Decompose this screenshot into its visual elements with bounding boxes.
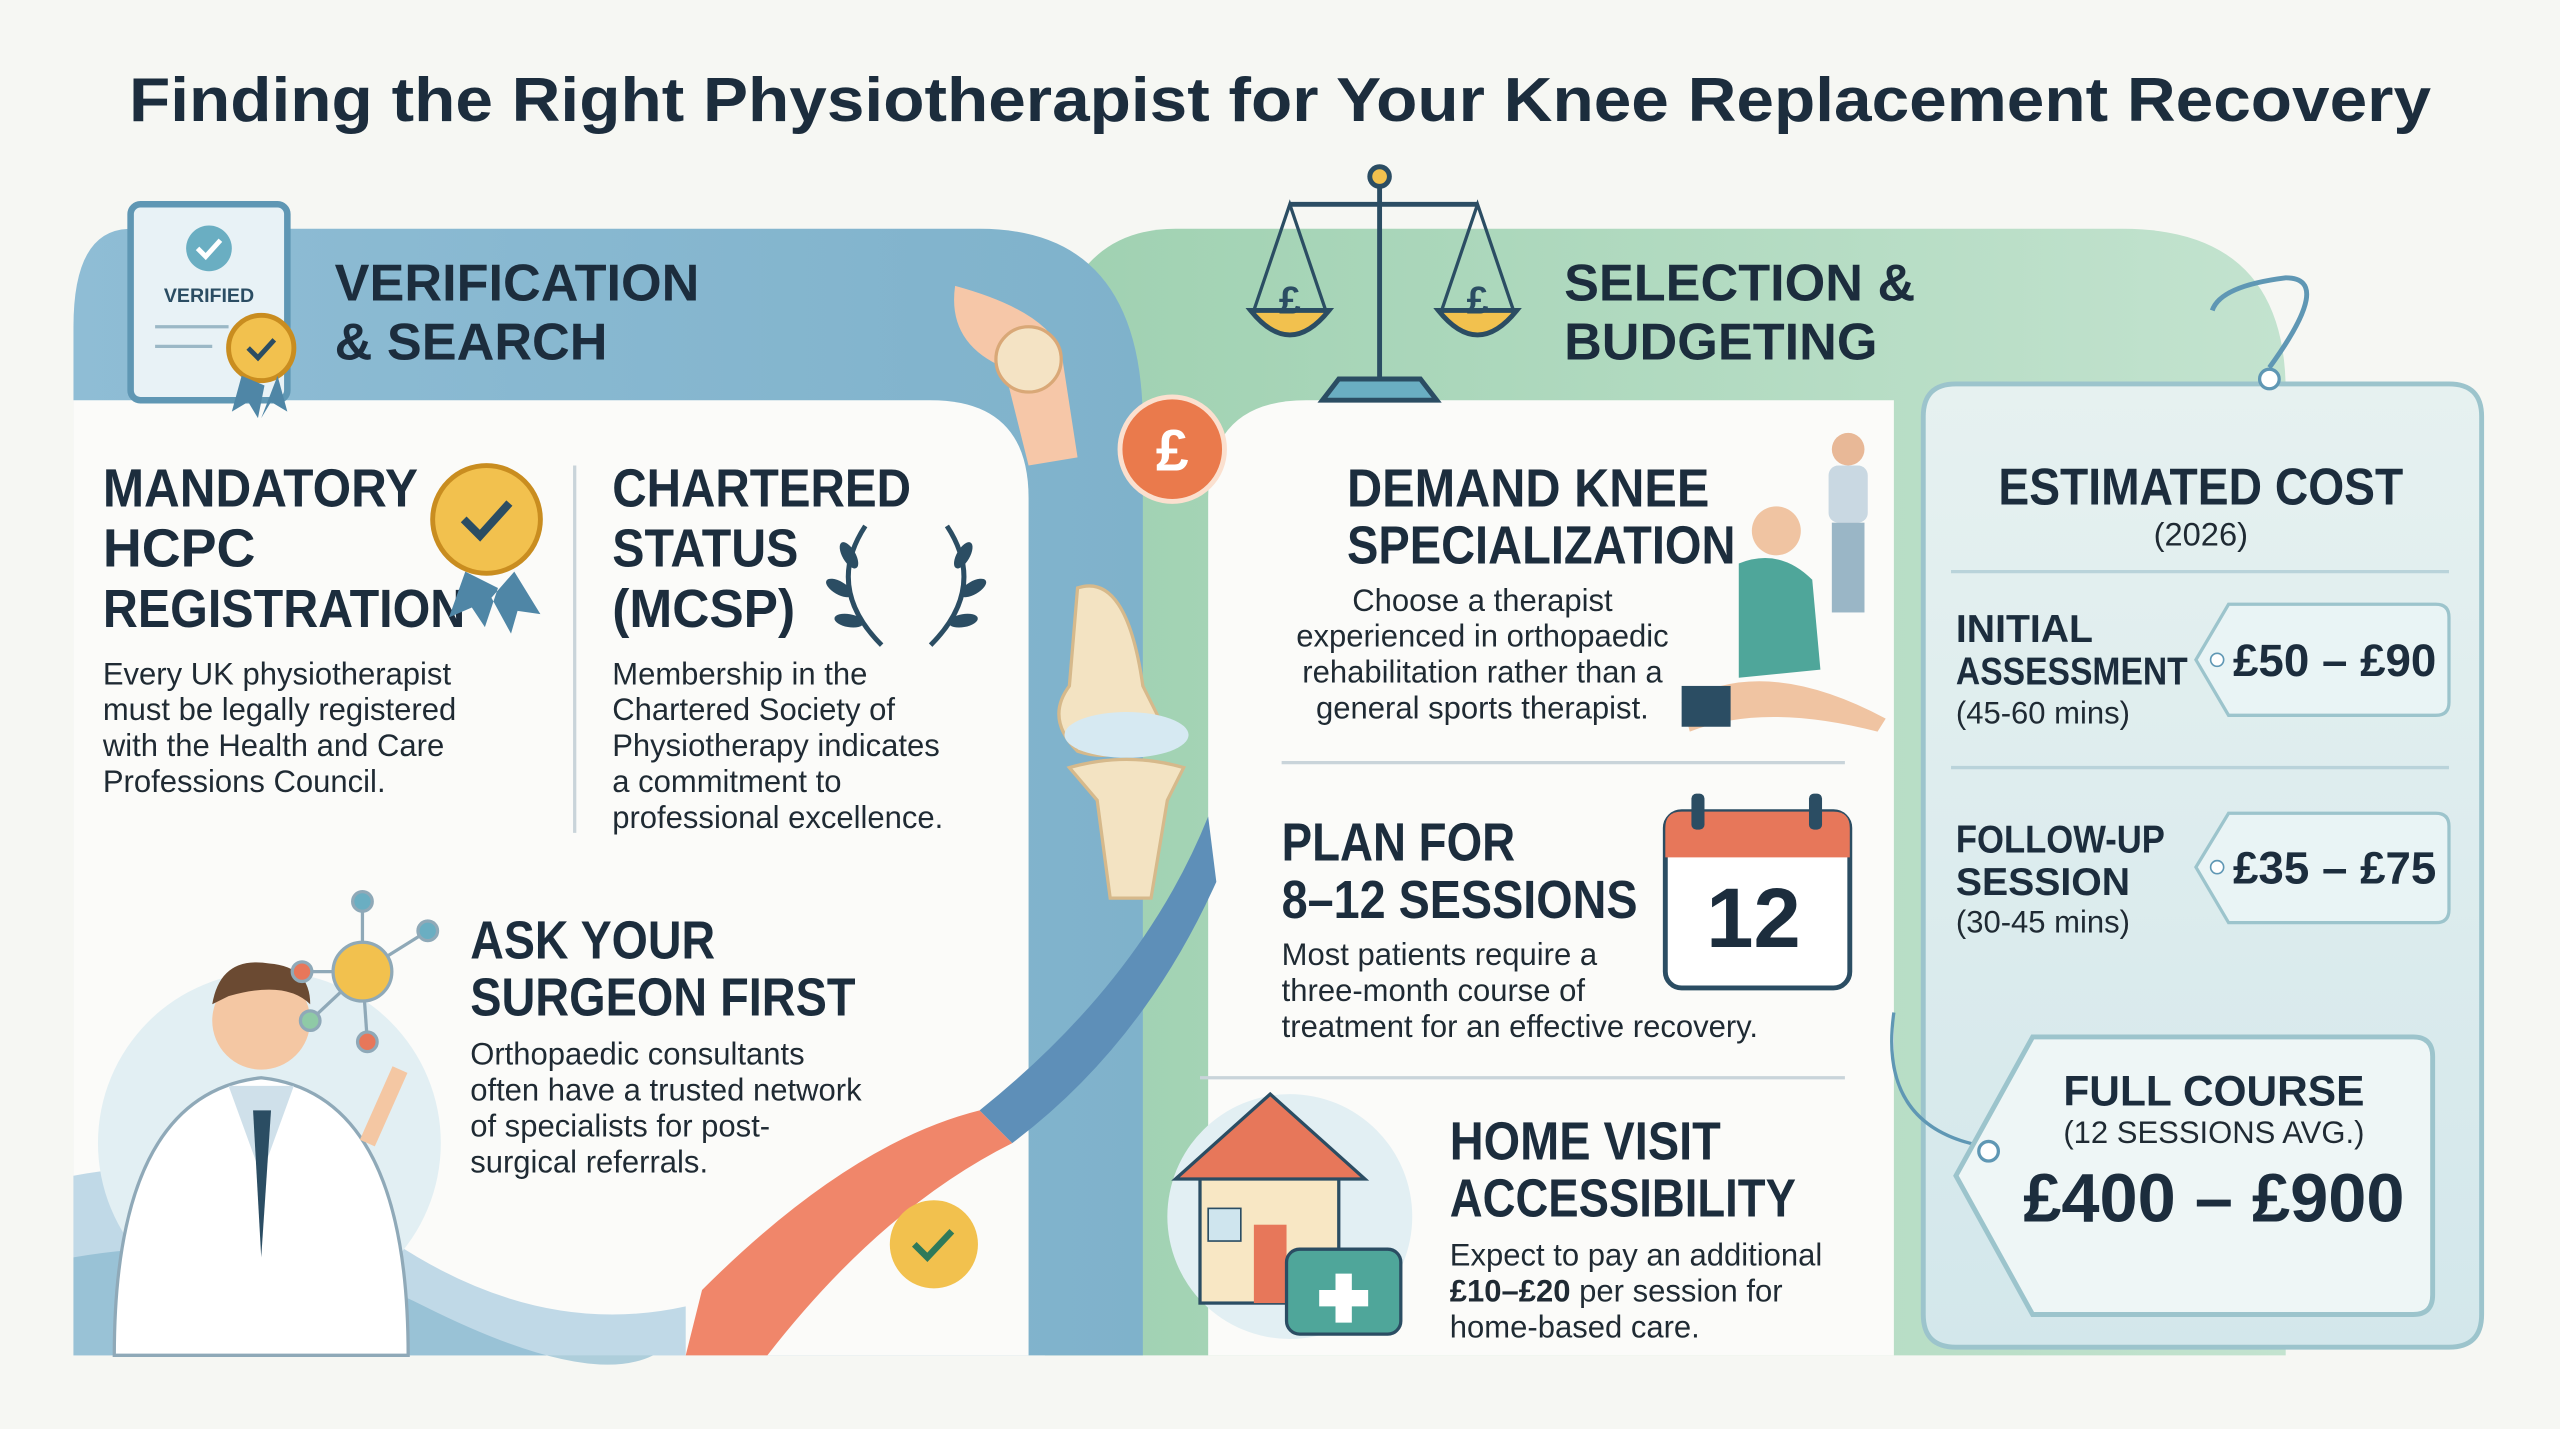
section: chartered: Chartered Society of <box>612 692 895 727</box>
section: home visit: £10–£20 per session for <box>1450 1273 1783 1308</box>
section: chartered <box>612 458 989 835</box>
price row: initial: £50 – £90 <box>2233 635 2436 686</box>
section: knee specialization: DEMAND KNEE <box>1347 458 1709 518</box>
title: Finding the Right Physiotherapist for Your Knee Replacement Recovery <box>129 66 2432 135</box>
icon: balance scale: £ <box>1467 280 1489 323</box>
section: sessions <box>1282 813 1758 1044</box>
icon: pound coin <box>1120 397 1224 501</box>
price tag: full course <box>1892 1012 2433 1314</box>
section: HCPC: MANDATORY <box>103 458 418 518</box>
heading: verification & search: VERIFICATION <box>335 255 699 313</box>
section: sessions: treatment for an effective recovery. <box>1282 1009 1758 1044</box>
price tag: full course: £400 – £900 <box>2023 1159 2405 1236</box>
heading: selection & budgeting: BUDGETING <box>1564 313 1878 371</box>
price row: follow-up: (30-45 mins) <box>1956 904 2130 939</box>
section: surgeon: of specialists for post- <box>470 1109 770 1144</box>
icon: verified certificate: VERIFIED <box>164 285 254 307</box>
section: HCPC: Every UK physiotherapist <box>103 656 451 691</box>
section: HCPC <box>102 458 540 799</box>
section: sessions: PLAN FOR <box>1282 813 1515 873</box>
heading: estimated cost: ESTIMATED COST <box>1998 459 2403 517</box>
section: HCPC: must be legally registered <box>103 692 456 727</box>
section: surgeon: Orthopaedic consultants <box>470 1037 805 1072</box>
section: sessions: Most patients require a <box>1282 937 1598 972</box>
icon: laurel <box>823 526 989 645</box>
panel: price tag <box>1892 278 2482 1347</box>
section: chartered: Membership in the <box>612 656 867 691</box>
heading: selection & budgeting <box>1564 255 1915 371</box>
icon: balance scale: £ <box>1279 280 1301 323</box>
panel: blue ribbon <box>73 229 1143 1355</box>
heading: verification & search: & SEARCH <box>335 313 608 371</box>
panel: green ribbon <box>1045 229 2286 1355</box>
section: chartered: CHARTERED <box>612 458 911 518</box>
price row: initial: INITIAL <box>1956 608 2093 651</box>
section: surgeon: SURGEON FIRST <box>470 968 856 1028</box>
section: knee specialization: Choose a therapist <box>1352 583 1613 618</box>
section: knee specialization <box>1296 458 1736 726</box>
price row: initial: ASSESSMENT <box>1956 650 2188 693</box>
price row: follow-up: SESSION <box>1956 861 2130 904</box>
section: surgeon <box>470 911 862 1179</box>
section: sessions: three-month course of <box>1282 973 1585 1008</box>
icon: network <box>292 892 438 1052</box>
section: HCPC: with the Health and Care <box>102 728 444 763</box>
section: home visit: Expect to pay an additional <box>1450 1238 1822 1273</box>
section: knee specialization: SPECIALIZATION <box>1347 515 1736 575</box>
section: surgeon: often have a trusted network <box>470 1073 862 1108</box>
section: chartered: a commitment to <box>612 764 841 799</box>
price row: follow-up: FOLLOW-UP <box>1956 818 2165 861</box>
section: knee specialization: rehabilitation rather than a <box>1302 655 1663 690</box>
section: home visit: home-based care. <box>1450 1309 1700 1344</box>
panel: price tag: (2026) <box>2154 516 2248 553</box>
section: knee specialization: general sports therapist. <box>1316 691 1649 726</box>
price row: follow-up <box>1956 813 2449 939</box>
icon: pound coin: £ <box>1156 418 1189 483</box>
icon: verified certificate <box>131 204 294 418</box>
heading: selection & budgeting: SELECTION & <box>1564 255 1915 313</box>
section: chartered: STATUS <box>612 519 798 579</box>
section: chartered: (MCSP) <box>612 579 795 639</box>
section: knee specialization: experienced in orthopaedic <box>1296 619 1669 654</box>
section: chartered: Physiotherapy indicates <box>612 728 940 763</box>
price tag: full course: FULL COURSE <box>2063 1068 2364 1115</box>
icon: doctor <box>98 962 441 1355</box>
section: HCPC: HCPC <box>103 519 255 579</box>
icon: calendar <box>1665 794 1850 988</box>
section: home visit: ACCESSIBILITY <box>1450 1169 1796 1229</box>
section: chartered: professional excellence. <box>612 800 943 835</box>
price tag: full course: (12 SESSIONS AVG.) <box>2063 1115 2364 1150</box>
price row: initial <box>1956 604 2449 730</box>
icon: knee joint <box>954 286 1078 466</box>
section: surgeon: surgical referrals. <box>470 1144 708 1179</box>
icon: house and bag <box>1167 1094 1412 1339</box>
icon: gold badge <box>433 466 540 634</box>
section: sessions: 8–12 SESSIONS <box>1282 870 1638 930</box>
price row: initial: (45-60 mins) <box>1956 695 2130 730</box>
icon: check circle <box>890 1200 978 1288</box>
panel: right white card <box>1208 400 1894 1355</box>
panel: left white card <box>73 400 1029 1355</box>
section: surgeon: ASK YOUR <box>470 911 715 971</box>
heading: verification & search <box>335 255 699 371</box>
section: HCPC: REGISTRATION <box>103 579 465 639</box>
section: home visit <box>1450 1111 1822 1344</box>
icon: calendar: 12 <box>1706 870 1801 965</box>
price row: follow-up: £35 – £75 <box>2233 842 2436 893</box>
section: HCPC: Professions Council. <box>103 764 386 799</box>
icon: knee skeleton <box>1059 586 1189 898</box>
icon: resistance band <box>686 817 1216 1355</box>
blue waves bottom left <box>73 1168 686 1365</box>
icon: therapist <box>1682 433 1886 732</box>
section: home visit: HOME VISIT <box>1450 1111 1721 1171</box>
icon: balance scale <box>1251 167 1517 400</box>
